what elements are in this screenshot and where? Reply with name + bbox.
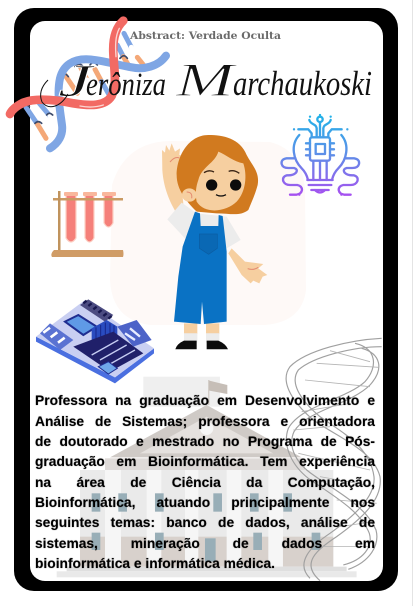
- biography text block: Bioinformática, atuando principalmente nos: [35, 495, 375, 510]
- biography text block: na área de Ciência da Computação,: [35, 474, 375, 490]
- eyes and brows: [206, 179, 217, 191]
- biography text block: de doutorado e mestrado no Programa de Pós-: [35, 434, 375, 449]
- subtitle: Abstract: Verdade Oculta: [129, 30, 281, 42]
- face: [196, 152, 245, 210]
- biography text block: Análise de Sistemas; professora e orientadora: [35, 414, 375, 428]
- ear: [182, 188, 197, 202]
- test tube rack: [51, 191, 124, 257]
- lowered arm: [228, 248, 267, 283]
- raised arm: [162, 143, 185, 213]
- dna helix: red and blue: [10, 21, 166, 148]
- character: child with blue overalls: [162, 135, 267, 349]
- biography text block: seguintes temas: banco de dados, análise de: [35, 515, 375, 530]
- watermark: university building: [57, 377, 357, 577]
- title: name in script style: erôniza: [86, 67, 166, 103]
- hair: [177, 135, 258, 214]
- title: name in script style: archaukoski: [233, 64, 372, 103]
- flag: [208, 380, 227, 405]
- title: name in script style: M: [175, 54, 238, 107]
- title: name in script style: J: [58, 55, 96, 106]
- right edge line: [412, 0, 413, 606]
- biography text block: sistemas, mineração de dados em: [35, 536, 375, 551]
- biography text block: Professora na graduação em Desenvolvimento e: [35, 393, 375, 408]
- biography text block: graduação em Bioinformática. Tem experiência: [35, 454, 375, 469]
- shirt: [167, 203, 241, 248]
- rungs: [26, 33, 145, 138]
- title: name in script style: [41, 54, 372, 107]
- rung clasps: [23, 56, 148, 123]
- lightbulb chip icon: [282, 115, 359, 195]
- overalls: [174, 212, 227, 324]
- soft background blob: [110, 141, 306, 325]
- biography text block: bioinformática e informática médica.: [35, 556, 275, 571]
- legs and socks: [184, 323, 219, 334]
- red strand: [10, 21, 123, 114]
- watermark: gray dna helix: [286, 338, 382, 581]
- blue strand: [50, 56, 166, 148]
- biography text block: [35, 393, 376, 571]
- mouth: [216, 195, 226, 196]
- motherboard: [36, 299, 154, 383]
- shoes: [175, 341, 228, 349]
